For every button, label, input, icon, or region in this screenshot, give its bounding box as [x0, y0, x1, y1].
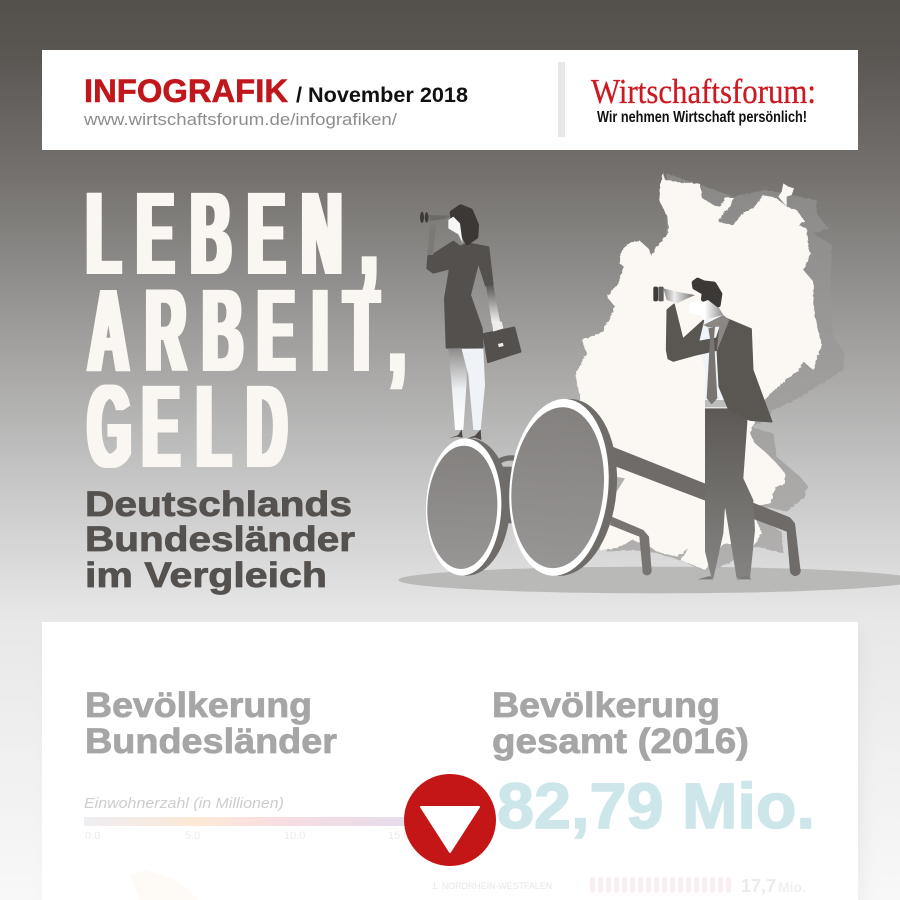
heading: total population [492, 686, 749, 761]
ground shadow [398, 567, 900, 593]
scale legend: 5.0 [185, 830, 200, 842]
state ranking row: 1. NORDRHEIN-WESTFALEN [432, 881, 552, 892]
jacket [667, 304, 772, 422]
map shadow [607, 173, 845, 572]
binoculars [653, 287, 695, 303]
subtitle: im Vergleich [85, 556, 327, 595]
big binocular frame bars [498, 445, 801, 576]
total population number: 82,79 Mio. [497, 770, 815, 842]
face and neck [689, 298, 723, 320]
hair [452, 207, 477, 243]
state ranking row: Mio. [778, 879, 806, 895]
subtitle: Deutschlands [85, 485, 352, 524]
header date: / November 2018 [296, 84, 468, 107]
briefcase [483, 322, 521, 362]
scale legend: Einwohnerzahl (in Millionen) [84, 795, 284, 812]
logo: Wirtschaftsforum: [591, 72, 816, 111]
state ranking row [432, 876, 806, 896]
shirt [698, 315, 727, 407]
header url: www.wirtschaftsforum.de/infografiken/ [83, 110, 397, 129]
logo [591, 72, 816, 126]
main title [86, 168, 405, 493]
heading: population by state: Bundesländer [85, 722, 337, 761]
state ranking row: 17,7 [741, 876, 776, 896]
main title: ARBEIT, [88, 265, 405, 397]
header panel [42, 50, 858, 150]
heading: population by state [85, 686, 337, 761]
map of Germany [575, 172, 822, 570]
hair [694, 280, 720, 305]
right lens [502, 394, 624, 580]
tie [707, 327, 717, 404]
west map shadow patch [615, 477, 625, 492]
island [778, 183, 794, 207]
illustration [398, 172, 900, 593]
subtitle: Bundesländer [85, 520, 355, 559]
scale legend [84, 795, 414, 842]
scroll-down arrow button [404, 774, 496, 866]
faint map start [130, 870, 200, 900]
logo: Wir nehmen Wirtschaft persönlich! [597, 109, 807, 126]
businesswoman [420, 207, 521, 440]
collar [703, 315, 729, 352]
binoculars [420, 212, 450, 223]
subtitle [85, 485, 355, 595]
main title: LEBEN, [86, 168, 377, 300]
content panel shadow [50, 630, 862, 900]
heading: total population: Bevölkerung [492, 686, 720, 725]
businessman [653, 280, 772, 579]
scale legend: 0.0 [85, 830, 100, 842]
left lens [424, 437, 512, 577]
scale legend: 15.0 [388, 830, 409, 842]
trousers [705, 408, 755, 578]
lower arm [486, 285, 500, 323]
shoes [697, 576, 752, 579]
header heading: Infografik: INFOGRAFIK [84, 73, 288, 109]
main title: GELD [88, 361, 287, 493]
raised arm [427, 224, 436, 255]
legs [448, 349, 467, 430]
shoes [449, 429, 481, 440]
heading: population by state: Bevölkerung [85, 686, 312, 725]
face [448, 217, 463, 243]
heading: total population: gesamt (2016) [492, 722, 749, 761]
content panel [42, 622, 858, 900]
scale legend: 10.0 [284, 830, 305, 842]
dress [427, 242, 493, 348]
